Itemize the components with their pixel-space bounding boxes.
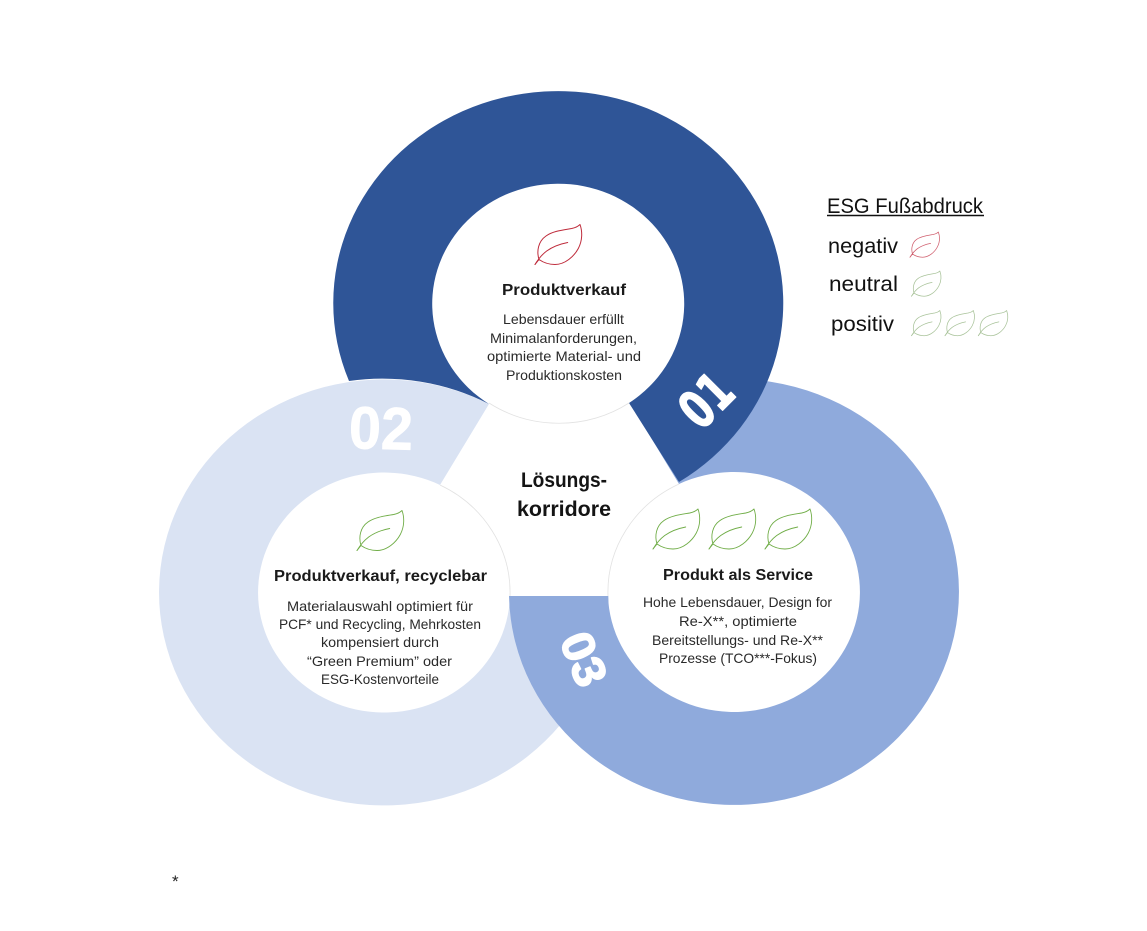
description [643, 594, 832, 666]
ring 01 (dark blue) [333, 91, 783, 482]
heading: Produkt als Service [663, 567, 813, 584]
ring 02 (light blue) [159, 379, 609, 805]
legend title: ESG Fußabdruck [827, 195, 983, 218]
ring 03 (mid blue) [509, 379, 959, 805]
center label: Lösungskorridore: Lösungs- [521, 469, 607, 492]
panel: Produktverkauf, recyclebar [274, 510, 487, 687]
icon: three green leaves [653, 509, 812, 549]
description: kompensiert durch [321, 634, 439, 650]
description: optimierte Material- und [487, 348, 641, 364]
description: Lebensdauer erfüllt [503, 311, 624, 327]
description: “Green Premium” oder [307, 653, 452, 669]
legend row: negativ: negativ [828, 235, 899, 258]
legend row: negativ [828, 232, 939, 258]
legend row: neutral [829, 271, 941, 296]
panel: Produktverkauf [487, 224, 641, 383]
description: Produktionskosten [506, 367, 622, 383]
heading: Produktverkauf [502, 282, 627, 299]
legend row: positiv: positiv [831, 313, 895, 336]
description: Re-X**, optimierte [679, 613, 797, 629]
description [487, 311, 641, 383]
icon: red leaf [535, 224, 582, 264]
description: PCF* und Recycling, Mehrkosten [279, 616, 481, 632]
number 01: 01 [667, 361, 747, 441]
description: Bereitstellungs- und Re-X** [652, 632, 824, 648]
center label: Lösungskorridore: korridore [517, 498, 611, 521]
description: Prozesse (TCO***-Fokus) [659, 650, 817, 666]
description: Materialauswahl optimiert für [287, 598, 473, 614]
number 03: 03 [550, 624, 618, 694]
description: ESG-Kostenvorteile [321, 671, 439, 687]
description: Hohe Lebensdauer, Design for [643, 594, 832, 610]
center label: Lösungskorridore [517, 469, 611, 521]
panel: Produkt als Service [643, 509, 832, 666]
description [279, 598, 481, 687]
legend row: neutral: neutral [829, 273, 898, 296]
legend row: positiv [831, 310, 1008, 336]
heading: Produktverkauf, recyclebar [274, 568, 487, 585]
number 02: 02 [348, 394, 414, 463]
legend: ESG Fußabdruck [827, 195, 1008, 336]
icon: green leaf [357, 510, 404, 550]
footnote asterisk: * [172, 872, 179, 891]
description: Minimalanforderungen, [490, 330, 637, 346]
